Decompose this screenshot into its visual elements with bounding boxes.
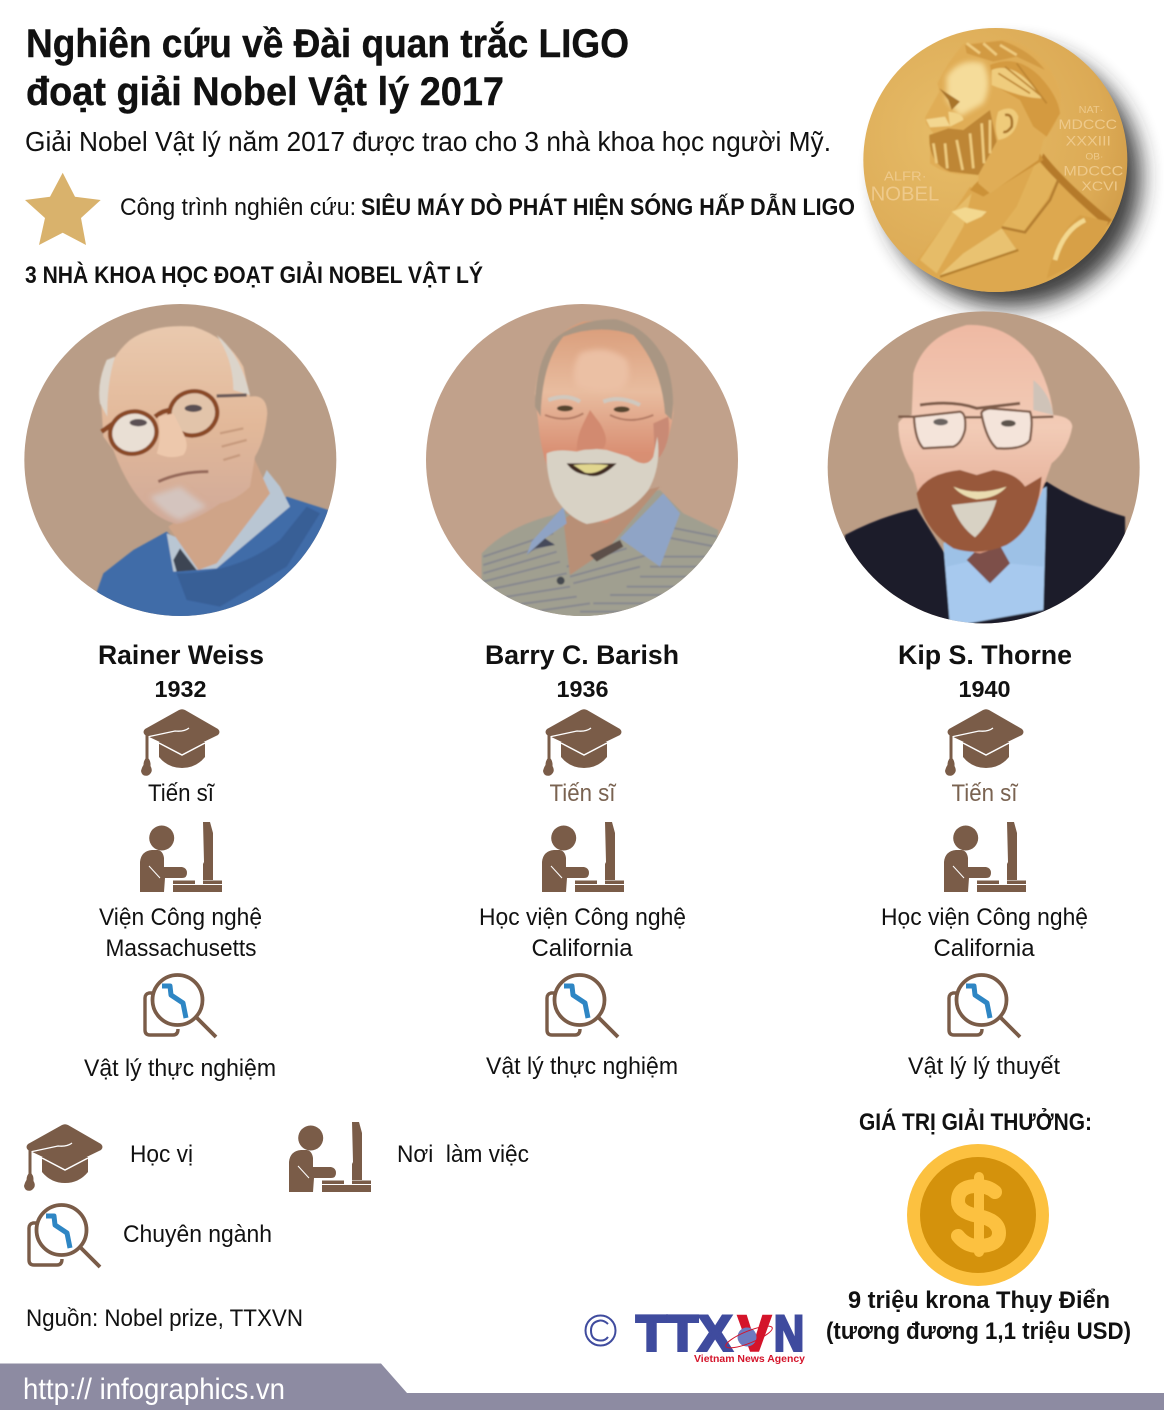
portrait: Barry C. Barish bbox=[426, 304, 738, 633]
beard bbox=[929, 110, 997, 175]
legend bbox=[24, 1122, 529, 1267]
ear bbox=[996, 108, 1018, 140]
birth year: 1932 bbox=[154, 676, 206, 702]
prize value text: (tương đương 1,1 triệu USD) bbox=[826, 1318, 1131, 1345]
logo: TTXVN: N bbox=[774, 1306, 804, 1362]
legend icon: person at computer bbox=[289, 1122, 371, 1192]
medal inscriptions: ALFR· bbox=[884, 169, 927, 184]
eye and nose bbox=[939, 88, 960, 110]
logo: TTXVN: V bbox=[738, 1306, 772, 1362]
forehead highlight bbox=[947, 62, 988, 117]
icon: person at computer bbox=[944, 822, 1026, 892]
research work line bbox=[120, 192, 855, 221]
legend icon: graduation cap bbox=[24, 1124, 102, 1191]
name: Kip S. Thorne bbox=[898, 640, 1072, 670]
subtitle: Giải Nobel Vật lý năm 2017 được trao cho 3 nhà khoa học người Mỹ. bbox=[25, 126, 831, 157]
panel: Rainer Weiss bbox=[24, 304, 336, 1082]
portrait: Rainer Weiss bbox=[24, 304, 336, 633]
workplace: Viện Công nghệ bbox=[99, 904, 262, 931]
workplace bbox=[881, 904, 1088, 962]
bust and coat bbox=[918, 167, 1112, 292]
icon: star bbox=[25, 173, 101, 245]
medal inscriptions: MDCCC bbox=[1058, 116, 1117, 132]
logo: TTXVN bbox=[636, 1306, 805, 1365]
footer url: http:// infographics.vn bbox=[23, 1373, 285, 1406]
icon: graduation cap bbox=[543, 709, 622, 776]
icon: magnifier bbox=[145, 975, 216, 1037]
legend icon: magnifier bbox=[29, 1205, 100, 1267]
panel: Barry C. Barish bbox=[426, 304, 738, 1080]
medal inscriptions: XXXIII bbox=[1066, 132, 1111, 148]
heading: three scientists: 3 NHÀ KHOA HỌC ĐOẠT GIẢI NOBEL VẬT LÝ bbox=[25, 260, 483, 289]
birth year: 1936 bbox=[556, 676, 608, 702]
medal inscriptions bbox=[871, 105, 1123, 206]
name: Barry C. Barish bbox=[485, 640, 679, 670]
workplace: Học viện Công nghệ bbox=[479, 904, 686, 931]
icon: copyright bbox=[586, 1316, 616, 1346]
head bbox=[926, 53, 1040, 193]
workplace: California bbox=[934, 935, 1035, 962]
degree: Tiến sĩ bbox=[148, 780, 215, 807]
legend label: workplace: Nơi làm việc bbox=[397, 1141, 529, 1168]
medal inscriptions: MDCCC bbox=[1063, 162, 1123, 178]
workplace bbox=[479, 904, 686, 962]
medal inscriptions: OB· bbox=[1085, 151, 1103, 161]
panel: Kip S. Thorne bbox=[828, 311, 1140, 1080]
logo: TTXVN: TTX bbox=[636, 1306, 732, 1362]
degree: Tiến sĩ bbox=[550, 780, 617, 807]
prize value text bbox=[826, 1287, 1131, 1345]
legend label: specialty: Chuyên ngành bbox=[123, 1221, 272, 1248]
workplace: Massachusetts bbox=[106, 935, 256, 962]
workplace: California bbox=[532, 935, 633, 962]
icon: Nobel medal bbox=[863, 28, 1127, 297]
source: Nguồn: Nobel prize, TTXVN bbox=[26, 1305, 303, 1332]
title: Nghiên cứu về Đài quan trắc LIGO bbox=[26, 20, 629, 66]
icon: person at computer bbox=[140, 822, 222, 892]
hair bbox=[990, 61, 1060, 137]
prize value heading: GIÁ TRỊ GIẢI THƯỞNG: bbox=[859, 1107, 1092, 1136]
prize value text: 9 triệu krona Thụy Điển bbox=[848, 1287, 1110, 1314]
research work line: Công trình nghiên cứu: bbox=[120, 194, 356, 221]
title: đoạt giải Nobel Vật lý 2017 bbox=[26, 70, 504, 114]
logo: TTXVN: Vietnam News Agency bbox=[694, 1353, 805, 1365]
icon: person at computer bbox=[542, 822, 624, 892]
medal inscriptions: NOBEL bbox=[871, 184, 939, 206]
workplace bbox=[99, 904, 262, 962]
research work line: SIÊU MÁY DÒ PHÁT HIỆN SÓNG HẤP DẪN LIGO bbox=[361, 192, 855, 221]
specialty: Vật lý thực nghiệm bbox=[84, 1055, 276, 1082]
portrait: Kip S. Thorne bbox=[828, 311, 1140, 633]
workplace: Học viện Công nghệ bbox=[881, 904, 1088, 931]
footer bar bbox=[0, 1364, 1164, 1410]
icon: magnifier bbox=[949, 975, 1020, 1037]
medal inscriptions: XCVI bbox=[1081, 179, 1118, 194]
specialty: Vật lý lý thuyết bbox=[908, 1053, 1060, 1080]
icon: dollar coin bbox=[907, 1144, 1049, 1286]
birth year: 1940 bbox=[958, 676, 1010, 702]
name: Rainer Weiss bbox=[98, 640, 264, 670]
medal inscriptions: NAT· bbox=[1079, 105, 1103, 116]
medal shadow bbox=[881, 47, 1141, 307]
icon: graduation cap bbox=[945, 709, 1024, 776]
specialty: Vật lý thực nghiệm bbox=[486, 1053, 678, 1080]
icon: magnifier bbox=[547, 975, 618, 1037]
icon: graduation cap bbox=[141, 709, 220, 776]
legend label: degree: Học vị bbox=[130, 1141, 193, 1168]
title bbox=[26, 20, 629, 114]
degree: Tiến sĩ bbox=[952, 780, 1019, 807]
